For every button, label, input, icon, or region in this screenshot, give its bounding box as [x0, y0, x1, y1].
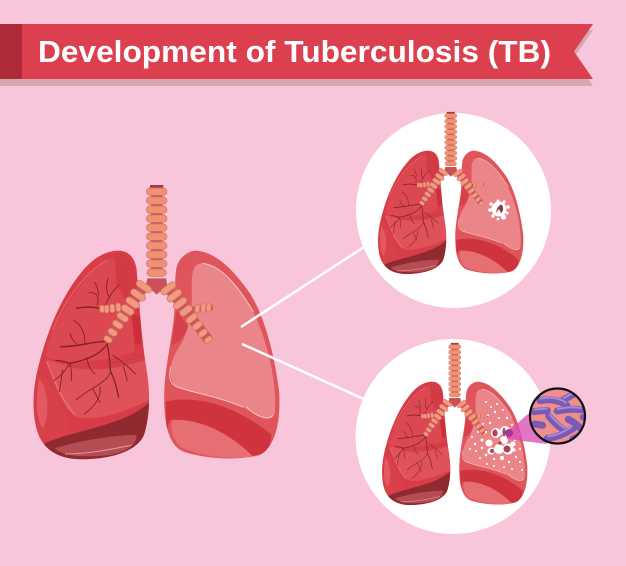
magnifier cone [507, 408, 547, 444]
tb lesion: early stage [488, 200, 510, 220]
main lungs [33, 185, 279, 463]
small lungs: early stage [378, 112, 523, 276]
title banner [0, 24, 593, 86]
small lungs: advanced stage [382, 343, 527, 507]
circle: advanced stage [356, 339, 550, 534]
circle: early stage [356, 113, 551, 308]
magnifier: bacteria [530, 388, 590, 444]
connector lines [241, 247, 366, 400]
title: Development of Tuberculosis (TB) [38, 34, 551, 69]
infected spot [505, 429, 513, 437]
tb lesions: advanced stage [469, 401, 523, 471]
